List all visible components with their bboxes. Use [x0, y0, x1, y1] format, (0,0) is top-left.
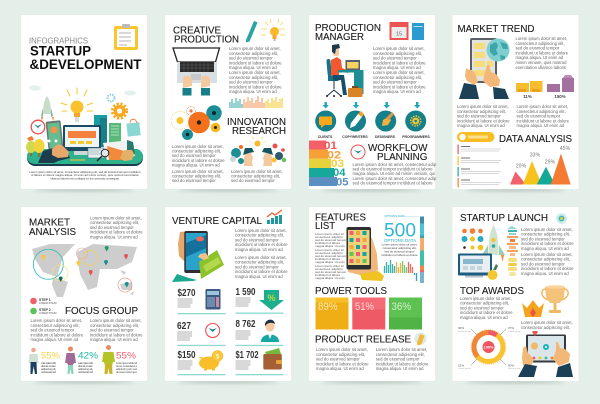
text block: incididunt ut labore et dolore [229, 84, 282, 89]
chart: 150 percent boxes [547, 75, 574, 99]
stat: $150 [178, 350, 226, 375]
text block: consectetur adipiscing elit, [460, 301, 509, 306]
text block: magna aliqua. Ut enim ad [172, 162, 220, 167]
role: designers: DESIGNERS [375, 135, 396, 139]
person stat: 42 percent: sit amet, consec [78, 364, 94, 368]
person stat: 42 percent [65, 346, 98, 374]
text block: sed do eiusmod tempor [373, 56, 417, 60]
text block: consectetur adipiscing elit, [231, 174, 280, 179]
person stat: 55 percent [102, 345, 137, 374]
icon: crown [522, 300, 544, 317]
text block: consectetur adipiscing elit, [30, 323, 80, 328]
text block: incididunt ut labore et dolore [316, 361, 369, 366]
legend: step 2 [30, 308, 57, 315]
stat: 500 options data: 500 [384, 219, 416, 241]
text block: sed do eiusmod tempor [90, 328, 134, 333]
heading: market trend: MARKET TREND [458, 23, 535, 35]
heading: data analysis: DATA ANALYSIS [499, 133, 572, 145]
text block: Lorem ipsum dolor sit amet, [376, 347, 427, 352]
heading: production manager: PRODUCTION [315, 22, 381, 34]
stat box: 51 percent: 51% [355, 301, 374, 313]
text block: incididunt ut labore et dolore [373, 60, 426, 65]
text block: exercitation ullamco laboris [516, 65, 566, 70]
icon: pencil badge [414, 332, 426, 346]
person stat: 55 percent [28, 348, 60, 374]
legend: step 2: STEP 2 [39, 308, 51, 312]
illustration: phone in hand [346, 227, 384, 281]
text block: sed do eiusmod tempor [457, 114, 501, 119]
chart: 150 percent boxes: 150% [554, 94, 566, 99]
heading: startup launch: STARTUP LAUNCH [460, 212, 548, 224]
page shadows [34, 188, 565, 384]
text block: Lorem ipsum dolor sit amet, [172, 144, 224, 149]
text block: consectetur adipiscing elit, [90, 323, 139, 328]
text block: Lorem ipsum dolor sit amet, [90, 216, 142, 220]
panel: market trend and data analysis [452, 15, 578, 189]
chart: donut: Lorem ipsum [508, 330, 521, 333]
text block: sed do eiusmod tempor [521, 236, 565, 241]
heading: workflow planning: PLANNING [377, 151, 428, 163]
text block: Lorem ipsum dolor sit amet, [516, 36, 567, 41]
arrows to roles [322, 102, 420, 108]
icon: clipboard [114, 24, 138, 50]
person stat: 55 percent: 55% [116, 351, 136, 361]
stat: 500 options data: Lorem ipsum dolor sit amet, [382, 242, 418, 246]
text block: magna aliqua. Ut enim ad [376, 366, 424, 371]
heading: top awards: TOP AWARDS [460, 285, 524, 297]
text block: magna aliqua. Ut enim ad [235, 247, 283, 252]
illustration: rocket [482, 225, 505, 262]
heading: market analysis [29, 216, 76, 238]
chart: numbered steps: 04 [333, 167, 346, 179]
role: clients [315, 110, 336, 139]
stat box: 36 percent: 36% [392, 301, 411, 313]
text block: Lorem ipsum dolor sit amet, [316, 347, 368, 352]
stat: 500 options data: OPTIONS DATA [384, 214, 405, 218]
title: infographics startup and development: STARTUP [30, 44, 91, 58]
illustration: two heads with ideas [230, 137, 286, 166]
illustration: manager at desk [326, 44, 364, 97]
chart: donut: 50% [508, 364, 514, 368]
text block: incididunt ut labore et dolore [229, 60, 282, 65]
icon: light bulb [261, 19, 285, 41]
text block: Lorem ipsum dolor sit amet, [373, 46, 425, 51]
chart: triangles: 20% [516, 164, 527, 170]
text: small columns [315, 232, 346, 280]
icon: calculator [206, 289, 220, 310]
stat: 1 590: 1 590 [236, 287, 256, 298]
heading: features list: FEATURES [315, 211, 366, 223]
heading: focus group: FOCUS GROUP [65, 305, 138, 317]
text block: incididunt ut labore et dolore [516, 50, 569, 55]
chart: donut: 15% [458, 364, 464, 368]
text: small columns: sed do eiusmod tempor [315, 238, 346, 242]
text block: Lorem ipsum dolor sit amet, [30, 318, 82, 323]
text block: magna aliqua. Ut enim ad [90, 234, 138, 239]
text block: consectetur adipiscing elit, [521, 232, 570, 237]
chart: donut [458, 326, 521, 370]
person stat: 55 percent: amet, consectetur a [116, 364, 137, 368]
chart: 11 percent boxes: 11% [523, 94, 532, 99]
text block: sed do eiusmod tempor incididunt ut labore [352, 180, 433, 185]
heading: workflow planning [368, 142, 428, 163]
icon: wallet [263, 348, 282, 370]
text block: Lorem ipsum dolor sit amet, [90, 318, 142, 323]
text block: magna aliqua. Ut enim ad minim veniam, qui [352, 171, 435, 176]
text block: incididunt ut labore et dolore [457, 118, 510, 123]
text block: consectetur adipiscing elit, [235, 233, 284, 238]
chart: numbered steps: 01 [324, 140, 337, 152]
text block: magna aliqua. Ut enim ad [516, 55, 564, 60]
text block: consectetur adipiscing elit, [457, 109, 506, 114]
person stat: 55 percent: adipiscing elit, sed [116, 367, 137, 371]
role: copywriters: COPYWRITERS [342, 135, 368, 139]
text block: magna aliqua. Ut enim ad [229, 65, 277, 70]
text block: consectetur adipiscing elit, [376, 352, 425, 357]
illustration: tablet with hands [518, 331, 573, 377]
vertical colour strip [420, 216, 424, 283]
legend: step 1: STEP 1 [39, 298, 51, 302]
text block: consectetur adipiscing elit, [316, 352, 365, 357]
world map [32, 244, 137, 297]
text block: sed do eiusmod tempor [172, 153, 216, 158]
stat: 627: 627 [177, 321, 191, 332]
text: small columns: Lorem ipsum dolor sit [315, 264, 344, 268]
heading: power tools: POWER TOOLS [315, 285, 387, 297]
person stat: 55 percent: do eiusmod tempor [116, 370, 137, 374]
text block: incididunt ut labore et dolore [90, 332, 143, 337]
stat: 8 762 [236, 319, 284, 346]
illustration: tablet and globe with hands [459, 38, 510, 99]
stat box: 89 percent: 89% [318, 301, 338, 313]
text block: sed do eiusmod tempor [316, 357, 360, 362]
chart: 11 percent boxes [516, 81, 542, 99]
text block: sed do eiusmod tempor incididunt ut labore [352, 167, 433, 172]
stat box: 51 percent [352, 298, 385, 330]
text block: incididunt ut labore et dolore [90, 230, 143, 235]
chart: donut: 100% [484, 346, 494, 350]
person stat: 55 percent: sit amet, consec [41, 364, 56, 368]
text block: magna aliqua. Ut enim ad [30, 337, 79, 342]
text block: consectetur adipiscing elit, [516, 41, 565, 46]
person stat: 42 percent: adipiscing elit, [78, 367, 93, 371]
person stat: 55 percent: Lorem ipsum dolor sit [116, 361, 137, 365]
icon: pencil [246, 21, 258, 42]
text block: consectetur adipiscing elit, [373, 75, 422, 80]
icon: percent arrow: % [267, 293, 276, 303]
text: small columns: incididunt ut labore [315, 257, 341, 261]
chart: numbered steps: 03 [331, 158, 344, 170]
bar chart [384, 260, 416, 281]
text block: magna aliqua. Ut enim ad [235, 274, 283, 279]
text block: consectetur adipiscing elit, [229, 51, 278, 56]
title: infographics startup and development [29, 36, 142, 72]
chart: triangles: 29% [545, 160, 556, 166]
stat: $1 702: $1 702 [236, 350, 259, 361]
text: small columns: Lorem ipsum dolor sit [315, 248, 344, 252]
chart: donut: Lorem ipsum [508, 367, 521, 370]
text: cover footer: Lorem ipsum dolor sit amet, consectetur adipiscing elit, sed do eiusmod tempor incididunt [30, 170, 141, 174]
chart: donut: 30% [458, 326, 464, 330]
text block: consectetur adipiscing elit, [90, 220, 139, 225]
text block: Lorem ipsum dolor sit amet, [231, 169, 283, 174]
icon: calendar [390, 22, 408, 40]
text block: magna aliqua. Ut enim ad [229, 89, 277, 94]
text block: incididunt ut labore et dolore [30, 332, 84, 337]
text block: incididunt ut labore et dolore [460, 310, 513, 315]
legend: step 1: LOREM IPSUM [39, 302, 57, 305]
text block: Lorem ipsum dolor sit amet, [229, 70, 281, 75]
text block: sed do eiusmod tempor [231, 178, 275, 183]
text block: Lorem ipsum dolor sit amet, consectetur adip [352, 162, 437, 167]
heading: creative production: PRODUCTION [174, 34, 239, 46]
stat: 8 762: 8 762 [236, 319, 256, 330]
text block: Lorem ipsum dolor sit amet, [521, 227, 573, 232]
panel: startup launch and top awards [452, 207, 578, 381]
role: programmers: PROGRAMMERS [402, 135, 430, 139]
text block: sed do eiusmod tempor [373, 80, 417, 84]
person stat: 55 percent: 55% [41, 351, 60, 361]
heading: innovation research [227, 116, 286, 137]
icon: rising chart [267, 210, 282, 224]
icon: trophy [542, 285, 568, 313]
text block: Lorem ipsum dolor sit amet, [521, 320, 573, 325]
text block: sed do eiusmod tempor [30, 328, 75, 333]
text block: Lorem ipsum dolor sit amet, [235, 228, 287, 233]
heading: production manager [315, 22, 381, 43]
heading: product release: PRODUCT RELEASE [315, 334, 411, 346]
text block: consectetur adipiscing elit, [172, 174, 221, 179]
icon: piggy bank: $ [216, 354, 220, 360]
icon: book [412, 23, 424, 40]
role: designers [375, 110, 396, 139]
text block: sed do eiusmod tempor [460, 305, 504, 310]
title: infographics startup and development: INFOGRAPHICS [29, 36, 88, 46]
text block: sed do eiusmod tempor [235, 264, 279, 269]
text: small columns: consectetur adipiscin [315, 235, 343, 239]
text block: sed do eiusmod tempor [229, 56, 273, 60]
panel: venture capital [165, 207, 291, 381]
text block: Lorem ipsum dolor sit amet, consectetur adip [352, 176, 437, 181]
heading: features list: LIST [315, 220, 336, 232]
text block: sed do eiusmod tempor [90, 225, 134, 230]
icon: clock [206, 324, 220, 338]
icon: businessman [261, 320, 279, 342]
text block: incididunt ut labore et dolore [235, 242, 288, 247]
text block: incididunt ut labore et dolore [235, 269, 288, 274]
illustration: monitor and apple [458, 254, 498, 280]
bar chart [230, 96, 282, 108]
text: small columns: sed do eiusmod tempor [315, 254, 346, 258]
text: small columns: Lorem ipsum dolor sit [315, 232, 344, 236]
dot grid [462, 228, 484, 250]
stat: $270: $270 [178, 288, 196, 299]
text block: Lorem ipsum dolor sit amet, [516, 104, 568, 109]
text block: consectetur adipiscing elit, [521, 257, 570, 262]
heading: innovation research: INNOVATION [227, 116, 286, 128]
person stat: 55 percent: sed do eiusmod [41, 370, 56, 374]
text block: sed do eiusmod tempor [235, 237, 279, 242]
legend list [458, 144, 501, 188]
heading: production manager: MANAGER [315, 31, 364, 43]
text: small columns: sed do eiusmod tempor [315, 270, 346, 274]
text block: magna aliqua. Ut enim ad [316, 366, 364, 371]
chart: numbered steps: 02 [327, 149, 341, 161]
chart: numbered steps: 05 [336, 176, 348, 188]
person stat: 42 percent: 42% [78, 351, 98, 361]
heading: innovation research: RESEARCH [232, 125, 286, 137]
heading: venture capital: VENTURE CAPITAL [172, 215, 262, 227]
text block: sed do eiusmod tempor [521, 261, 565, 266]
heading: workflow planning: WORKFLOW [368, 142, 428, 154]
icon: target badge [556, 213, 567, 224]
panel: market analysis and focus group [21, 207, 147, 381]
text block: sed do eiusmod tempor [376, 357, 420, 362]
heading: creative production [173, 24, 239, 46]
text: small columns: consectetur adipiscin [315, 267, 343, 271]
text block: consectetur adipiscing elit, [172, 149, 221, 154]
chart: triangles: 45% [560, 146, 571, 152]
text block: sed do eiusmod tempor [516, 114, 561, 119]
stat: 500 options data: incididunt ut labore et dolore [381, 253, 418, 257]
text: cover footer [30, 170, 141, 181]
chart: numbered steps [309, 140, 348, 188]
text block: Lorem ipsum dolor sit amet, [172, 169, 224, 174]
role: copywriters [342, 110, 368, 139]
stat: $1 702 [236, 350, 284, 375]
panel: creative production and innovation research [165, 15, 291, 189]
heading: market analysis: ANALYSIS [29, 226, 76, 238]
text block: Lorem ipsum dolor sit amet, [229, 46, 281, 51]
text: small columns: magna aliqua. Ut enim [315, 260, 346, 264]
text block: magna aliqua. Ut enim ad [373, 65, 421, 70]
text: small columns: magna aliqua. Ut enim [315, 244, 346, 248]
stat box: 36 percent [389, 298, 422, 330]
text block: Lorem ipsum dolor sit amet, [521, 252, 573, 257]
person stat: 42 percent: sed do eiusmod [78, 370, 93, 374]
badge: yellow pill [457, 132, 494, 142]
text block: consectetur adipiscing elit, [373, 51, 422, 56]
panel: features list, power tools, product release [309, 207, 435, 381]
person stat: 55 percent: Lorem ipsum dolor [41, 361, 56, 365]
text block: incididunt ut labore et dolore [516, 118, 570, 123]
stat: 500 options data: sed do eiusmod tempor [384, 250, 415, 254]
icon: calendar: 15 [396, 32, 402, 38]
text block: magna aliqua. Ut enim ad [90, 337, 138, 342]
chart: donut: Lorem ipsum [458, 367, 471, 370]
text block: consectetur adipiscing elit, [521, 325, 570, 330]
illustration: coloured stack [507, 226, 518, 276]
stat: $270 [178, 288, 226, 314]
stat box: 89 percent [316, 298, 348, 330]
icon: laptop with hands [173, 48, 220, 96]
text: small columns: incididunt ut labore [315, 241, 341, 245]
title: infographics startup and development: &DEVELOPMENT [30, 57, 142, 72]
text block: incididunt ut labore et dolore [373, 84, 426, 89]
legend: step 2: LOREM IPSUM [39, 312, 57, 315]
heading: market analysis: MARKET [29, 216, 71, 228]
panel: production manager and workflow planning [309, 15, 437, 189]
text block: minim veniam, quis nostrud [516, 60, 567, 65]
text block: incididunt ut labore et dolore [521, 241, 574, 246]
text block: magna aliqua. Ut enim ad [457, 123, 505, 128]
text block: incididunt ut labore et dolore [172, 158, 225, 163]
stat: 500 options data [381, 214, 419, 257]
text: cover footer: ullamco laboris nisi ut aliquip ex ea commodo consequat. [50, 177, 120, 181]
stat: $150: $150 [178, 350, 196, 361]
text block: sed do eiusmod tempor [172, 178, 216, 183]
illustration: phone in hand with card [172, 231, 224, 282]
text block: magna aliqua. Ut enim ad [516, 123, 565, 128]
text block: sed do eiusmod tempor [229, 80, 273, 84]
person stat: 55 percent: adipiscing elit, [41, 367, 56, 371]
text: small columns: magna aliqua. Ut enim [315, 276, 346, 280]
text: small columns: consectetur adipiscin [315, 251, 343, 255]
person stat: 42 percent: Lorem ipsum dolor [78, 361, 93, 365]
chart: donut: 37% [508, 326, 514, 330]
icon: piggy bank [199, 350, 223, 370]
text block: magna aliqua. Ut enim ad [521, 246, 569, 251]
text block: consectetur adipiscing elit, [229, 75, 278, 80]
illustration: gears [171, 105, 222, 140]
heading: features list [315, 211, 366, 232]
text block: incididunt ut labore et dolore [521, 266, 574, 271]
text: cover footer: ut labore et dolore magna aliqua. Ut enim ad minim veniam, quis nostrud exercitation [31, 173, 140, 177]
heading: creative production: CREATIVE [173, 24, 221, 36]
role: clients: CLIENTS [318, 135, 333, 139]
legend: step 1 [30, 298, 57, 305]
icon: clock [351, 145, 365, 159]
stat: 627 [177, 321, 226, 346]
text block: sed do eiusmod tempor [516, 46, 560, 51]
illustration: startup scene [26, 86, 143, 166]
stat: 500 options data: OPTIONS DATA [384, 238, 417, 243]
text block: incididunt ut labore et dolore [376, 361, 429, 366]
chart: donut: Lorem ipsum [458, 330, 471, 333]
text: small columns: incididunt ut labore [315, 273, 341, 277]
text block: Lorem ipsum dolor sit amet, [373, 70, 425, 75]
text block: Lorem ipsum dolor sit amet, [235, 255, 287, 260]
text block: magna aliqua. Ut enim ad [373, 89, 421, 94]
panel: startup and development cover [21, 15, 147, 189]
text block: magna aliqua. Ut enim ad [521, 271, 569, 276]
chart: triangles: 33% [530, 152, 541, 158]
text block: Lorem ipsum dolor sit amet, [457, 104, 509, 109]
role: programmers [402, 110, 430, 139]
stat: 1 590 [236, 287, 284, 314]
text block: consectetur adipiscing elit, [516, 109, 566, 114]
text block: magna aliqua. Ut enim ad [460, 315, 508, 320]
icon: percent arrow [259, 290, 284, 310]
chart: triangles [510, 146, 571, 184]
text block: consectetur adipiscing elit, [235, 260, 284, 265]
text block: Lorem ipsum dolor sit amet, [460, 296, 512, 301]
stat: 500 options data: consectetur adipiscing elit, [383, 246, 417, 250]
